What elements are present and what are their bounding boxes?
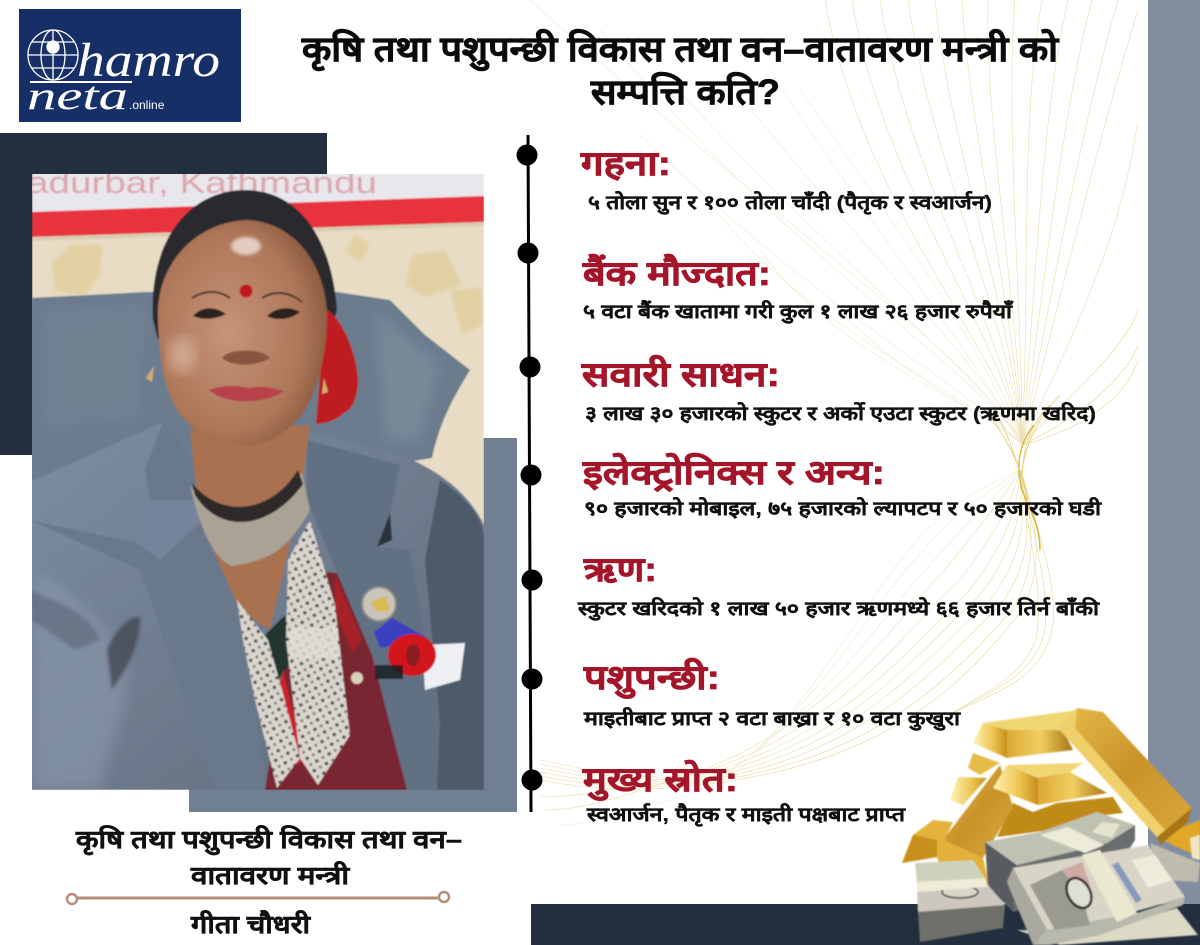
chair <box>30 292 470 482</box>
photo: minister portrait: adurbar, Kathmandu <box>27 165 377 200</box>
item: electronics and others: इलेक्ट्रोनिक्स र अन्य: <box>582 452 885 492</box>
cash: left stack <box>918 905 1005 942</box>
item: bank balance <box>582 253 1014 324</box>
logo: Hamro Neta: neta <box>27 73 128 118</box>
dress <box>265 570 407 790</box>
caption: minister role and name: गीता चौधरी <box>190 910 312 939</box>
logo: Hamro Neta <box>19 9 241 122</box>
item: main source: मुख्य स्रोत: <box>582 759 738 801</box>
caption: minister role and name <box>67 825 462 939</box>
gold: horizontal top bar <box>983 710 1077 730</box>
item: electronics and others <box>582 452 1102 520</box>
icon: globe <box>28 30 78 80</box>
title <box>301 29 1060 112</box>
item: bank balance: ५ वटा बैंक खातामा गरी कुल १ लाख २६ हजार रुपैयाँ <box>583 300 1014 324</box>
necklace <box>190 472 310 566</box>
item: electronics and others: ९० हजारको मोबाइल, ७५ हजारको ल्यापटप र ५० हजारको घडी <box>584 497 1102 520</box>
gold: long bar <box>1057 708 1192 837</box>
item: vehicles: ३ लाख ३० हजारको स्कुटर र अर्को एउटा स्कुटर (ऋणमा खरिद) <box>585 402 1096 426</box>
item: bank balance: बैंक मौज्दात: <box>582 253 771 293</box>
gold: central low bars <box>997 797 1123 837</box>
badge and flower <box>362 587 396 621</box>
item: main source: स्वआर्जन, पैतृक र माइती पक्षबाट प्राप्त <box>586 803 906 827</box>
item: main source <box>582 759 906 827</box>
item: vehicles <box>581 354 1096 426</box>
panel: bottom dark bar <box>531 904 1200 945</box>
item: livestock: पशुपन्छी: <box>583 657 720 699</box>
jewellery mesh <box>286 520 350 785</box>
caption: minister role and name: कृषि तथा पशुपन्छी विकास तथा वन– <box>75 825 462 856</box>
logo: Hamro Neta: hamro <box>77 34 220 87</box>
cash: right notes <box>1150 843 1200 882</box>
item: loan: ऋण: <box>583 551 657 589</box>
timeline <box>516 135 542 812</box>
item: livestock: माइतीबाट प्राप्त २ वटा बाख्रा र १० वटा कुखुरा <box>583 707 961 731</box>
item: jewellery: ५ तोला सुन र १०० तोला चाँदी (पैतृक र स्वआर्जन) <box>588 191 992 215</box>
blazer <box>30 422 484 790</box>
hair flower <box>316 310 358 424</box>
photo: minister portrait <box>27 165 484 790</box>
decorative gold line fan <box>530 0 1138 825</box>
caption: minister role and name: वातावरण मन्त्री <box>190 861 351 890</box>
title: कृषि तथा पशुपन्छी विकास तथा वन–वातावरण मन्त्री को <box>301 29 1060 71</box>
right lapel and sleeve <box>306 440 410 631</box>
item: livestock <box>583 657 961 731</box>
item: loan <box>577 551 1100 621</box>
item: jewellery <box>580 145 992 215</box>
illustration: gold bars and cash <box>902 708 1200 945</box>
panel: slate backing block <box>189 438 517 812</box>
gold: right lower block <box>1157 820 1200 857</box>
neck and chest <box>190 425 310 630</box>
face <box>158 220 327 445</box>
logo: Hamro Neta: .online <box>129 98 165 112</box>
title: सम्पत्ति कति? <box>590 72 780 112</box>
gold: middle bar <box>1007 763 1083 778</box>
panel: dark backing block <box>0 133 327 455</box>
panel: right side band <box>1148 0 1200 945</box>
gold: back blocks <box>968 753 1000 775</box>
cash: back stack <box>985 842 1017 912</box>
item: loan: स्कुटर खरिदको १ लाख ५० हजार ऋणमध्ये ६६ हजार तिर्न बाँकी <box>577 597 1100 621</box>
cash: sheet under front stack <box>1017 908 1198 945</box>
item: vehicles: सवारी साधन: <box>581 354 780 394</box>
gold: leaning bar <box>943 765 1013 858</box>
gold: lower left block <box>902 820 953 863</box>
hair <box>153 190 337 345</box>
item: jewellery: गहना: <box>580 145 671 183</box>
cash: front stack <box>1007 868 1047 945</box>
